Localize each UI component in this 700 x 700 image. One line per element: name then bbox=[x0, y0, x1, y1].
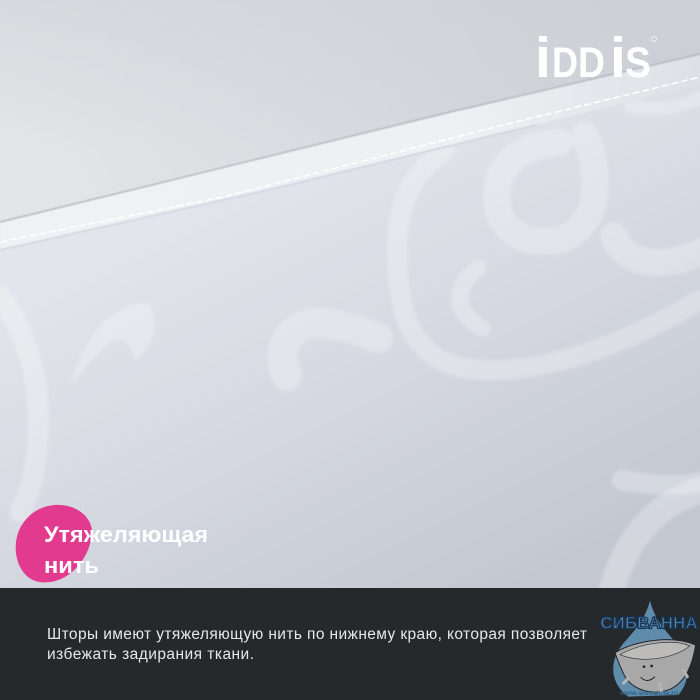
damask swirl pattern on the fabric bbox=[0, 98, 700, 590]
logo: IDDIS: D bbox=[578, 39, 605, 87]
brand name: СИБВАННА bbox=[600, 613, 698, 632]
logo: IDDIS: i bbox=[610, 26, 626, 90]
logo: Sibvanna water drop with bathtub bbox=[600, 601, 698, 697]
logo: IDDIS bbox=[535, 26, 656, 90]
footer description text: Шторы имеют утяжеляющую нить по нижнему краю, которая позволяет bbox=[47, 626, 587, 643]
logo: IDDIS: D bbox=[552, 39, 578, 87]
bathtub bbox=[615, 640, 696, 692]
footer description text: избежать задирания ткани. bbox=[47, 646, 254, 663]
heading: Утяжеляющая нить bbox=[44, 522, 208, 578]
footer bar bbox=[0, 588, 700, 700]
heading: Утяжеляющая нить: нить bbox=[44, 553, 99, 578]
background wall above the hem bbox=[0, 0, 700, 222]
water drop bbox=[613, 601, 687, 697]
logo: IDDIS: S bbox=[625, 39, 651, 87]
curtain hem band with stitching bbox=[0, 54, 700, 250]
site address: www.sibvanna.ru bbox=[619, 690, 678, 697]
logo: IDDIS: i bbox=[535, 26, 551, 90]
footer description text bbox=[47, 626, 587, 663]
badge: pink blob behind heading bbox=[16, 505, 92, 582]
heading: Утяжеляющая нить: Утяжеляющая bbox=[44, 522, 208, 547]
